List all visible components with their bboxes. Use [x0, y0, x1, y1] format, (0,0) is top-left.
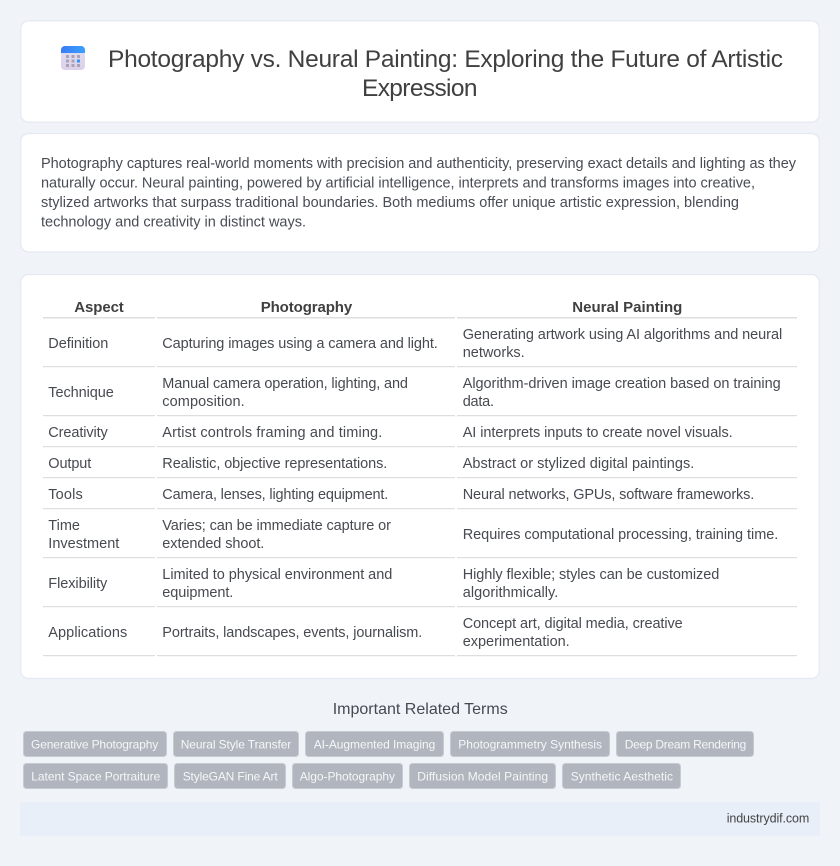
row: applications: Concept art, digital media, creative: [463, 616, 683, 632]
row: tools: [48, 487, 754, 503]
row: time investment: extended shoot.: [162, 536, 264, 552]
tag: algo-photography: [292, 764, 402, 788]
panel: introduction: [21, 134, 819, 252]
row: flexibility: equipment.: [162, 585, 233, 601]
row: definition: networks.: [463, 345, 525, 361]
row: flexibility: algorithmically.: [463, 585, 558, 601]
title: [108, 46, 783, 102]
row: output: Output: [48, 456, 91, 472]
row: time investment: Time: [48, 518, 80, 534]
tag: neural style transfer: Neural Style Transfer: [181, 737, 291, 751]
tag: latent space portraiture: Latent Space Portraiture: [31, 769, 161, 783]
title: Expression: [362, 75, 478, 102]
row: creativity: AI interprets inputs to create novel visuals.: [463, 425, 733, 441]
row: definition: Definition: [48, 336, 108, 352]
row: output: Abstract or stylized digital paintings.: [463, 456, 694, 472]
tag: synthetic aesthetic: [562, 764, 680, 788]
row: applications: Applications: [48, 625, 127, 641]
row: tools: Camera, lenses, lighting equipment.: [162, 487, 388, 503]
tag: ai-augmented imaging: AI-Augmented Imaging: [314, 737, 435, 751]
text block: introduction paragraph: Photography captures real-world moments with precision and authenticity, preserving exact details and lighting as they: [41, 156, 797, 172]
footer: industrydif.com: [727, 812, 809, 826]
tag: synthetic aesthetic: Synthetic Aesthetic: [571, 769, 673, 783]
text block: introduction paragraph: [41, 156, 797, 230]
tag: ai-augmented imaging: [306, 732, 444, 756]
panel: comparison table: [21, 274, 819, 678]
row: technique: Technique: [48, 385, 114, 401]
row: output: Realistic, objective representations.: [162, 456, 387, 472]
table header row: Photography: [261, 299, 353, 316]
row: creativity: Artist controls framing and timing.: [162, 425, 382, 441]
row: time investment: [48, 518, 778, 552]
table header row: [74, 299, 682, 316]
icon: calendar: [61, 46, 85, 70]
tag: neural style transfer: [174, 732, 298, 756]
row: time investment: Requires computational processing, training time.: [463, 527, 778, 543]
tag: photogrammetry synthesis: [450, 732, 610, 756]
row: flexibility: Limited to physical environment and: [162, 567, 392, 583]
row: flexibility: Flexibility: [48, 576, 108, 592]
tag group: related terms: [24, 732, 754, 788]
row: applications: [48, 616, 683, 650]
tag: deep dream rendering: [616, 732, 754, 756]
footer: [20, 802, 820, 836]
row: definition: Generating artwork using AI algorithms and neural: [463, 327, 782, 343]
tag: generative photography: [24, 732, 166, 756]
row: applications: experimentation.: [463, 634, 570, 650]
row: technique: [48, 376, 781, 410]
tag: stylegan fine art: [174, 764, 286, 788]
row: technique: Manual camera operation, lighting, and: [162, 376, 408, 392]
row: tools: Neural networks, GPUs, software frameworks.: [463, 487, 754, 503]
tag: photogrammetry synthesis: Photogrammetry Synthesis: [458, 737, 602, 751]
text block: introduction paragraph: technology and creativity in distinct ways.: [41, 214, 306, 230]
tag: diffusion model painting: [410, 764, 556, 788]
row: applications: Portraits, landscapes, events, journalism.: [162, 625, 422, 641]
row: definition: Capturing images using a camera and light.: [162, 336, 438, 352]
table header row: Aspect: [74, 299, 124, 316]
row: time investment: Varies; can be immediate capture or: [162, 518, 391, 534]
row: creativity: [48, 425, 733, 441]
tag: deep dream rendering: Deep Dream Rendering: [625, 737, 746, 751]
title: Photography vs. Neural Painting: Exploring the Future of Artistic: [108, 46, 783, 73]
tag: generative photography: Generative Photography: [31, 737, 158, 751]
tag: latent space portraiture: [24, 764, 168, 788]
row: definition: [48, 327, 782, 361]
heading: important related terms: Important Related Terms: [333, 701, 508, 718]
row: technique: data.: [463, 394, 494, 410]
text block: introduction paragraph: stylized artworks that surpass traditional boundaries. Both mediums offer unique artistic expression, blending: [41, 195, 739, 211]
row: technique: composition.: [162, 394, 245, 410]
row: flexibility: Highly flexible; styles can be customized: [463, 567, 719, 583]
panel: header: [21, 21, 819, 122]
row: time investment: Investment: [48, 536, 119, 552]
table header row: Neural Painting: [572, 299, 682, 316]
row: flexibility: [48, 567, 719, 601]
text block: introduction paragraph: naturally occur. Neural painting, powered by artificial intelligence, interprets and transforms images into creative,: [41, 176, 755, 192]
row: output: [48, 456, 694, 472]
row: tools: Tools: [48, 487, 83, 503]
row: creativity: Creativity: [48, 425, 109, 441]
row: technique: Algorithm-driven image creation based on training: [463, 376, 781, 392]
tag: stylegan fine art: StyleGAN Fine Art: [183, 769, 278, 783]
tag: algo-photography: Algo-Photography: [300, 769, 395, 783]
tag: diffusion model painting: Diffusion Model Painting: [417, 769, 548, 783]
